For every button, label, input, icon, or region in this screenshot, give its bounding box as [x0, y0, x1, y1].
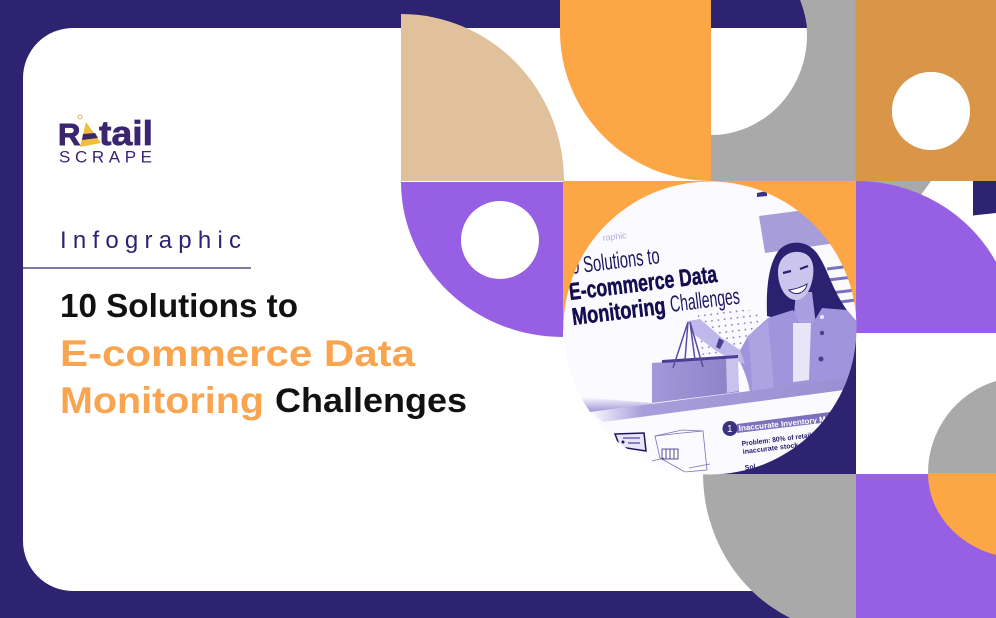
solution line: Sol: [744, 464, 756, 472]
fade under bag: [580, 397, 652, 412]
logo letter R: R: [58, 117, 80, 152]
preview heading small: raphic: [602, 230, 628, 243]
geometric shapes: [401, 0, 996, 618]
shape: white image backing: [563, 330, 713, 474]
hair: [766, 242, 848, 320]
shape: purple quarter with circle: [401, 182, 563, 337]
small navy mark: [757, 191, 767, 197]
dot grid: [698, 310, 758, 356]
jacket buttons: [818, 315, 824, 362]
shape: purple right quarter: [856, 181, 996, 333]
bag body: [652, 357, 739, 403]
eyes and brows: [783, 266, 808, 273]
problem line 2: inaccurate stock: [742, 442, 799, 456]
bag handles: [673, 322, 703, 368]
shape: orange half circle: [928, 473, 996, 555]
title line 3 highlight: Monitoring: [60, 380, 264, 421]
title: [60, 287, 467, 421]
counter band: [590, 378, 852, 422]
logo triangle icon: [78, 115, 101, 147]
bag side: [726, 357, 739, 393]
arm and hand: [688, 319, 745, 364]
title line 2: E-commerce Data: [60, 333, 415, 374]
logo subtitle: SCRAPE: [59, 148, 152, 166]
shape: grey bottom quarter: [703, 474, 856, 618]
shape: grey half circle: [928, 381, 996, 473]
preview contents: [555, 175, 865, 480]
pill text: Inaccurate Inventory Ma: [738, 414, 831, 433]
shape: dark orange square with circle: [856, 0, 996, 181]
shape: navy corner in cut-out: [711, 0, 807, 28]
problem text: [741, 433, 812, 472]
title line 3 end: Challenges: [275, 382, 467, 420]
face: [778, 252, 813, 300]
shape: grey sliver: [856, 181, 931, 195]
smile: [789, 284, 807, 294]
shape: navy corner: [700, 330, 856, 474]
shape: tan quarter circle: [401, 14, 564, 181]
number: 1: [727, 424, 733, 435]
divider line: [23, 267, 251, 269]
shape: orange image backing: [563, 181, 856, 351]
bag top edge: [662, 355, 738, 363]
woman: [688, 243, 858, 393]
logo word end: tail: [99, 115, 153, 153]
stripes: [827, 266, 856, 303]
shape: grey square with cut-out: [711, 0, 856, 181]
shape: white circle in orange square: [892, 72, 970, 150]
shape: purple bottom square: [856, 474, 996, 618]
jacket: [737, 308, 858, 393]
preview heading line 1: 0 Solutions to: [569, 242, 661, 279]
preview heading line 3: Monitoring: [570, 293, 667, 331]
shape: navy block: [973, 181, 996, 216]
step number badge: [722, 412, 833, 436]
shopping bag: [652, 322, 739, 403]
preview background: [555, 175, 865, 480]
jacket sleeve shading: [748, 320, 774, 392]
logo: [58, 115, 153, 166]
title line 1: 10 Solutions to: [60, 287, 298, 324]
preview heading line 3 end: Challenges: [668, 283, 741, 317]
tablet illustration: [615, 433, 646, 451]
neck: [794, 292, 816, 323]
shape: orange quarter circle: [560, 0, 711, 181]
box illustration: [652, 430, 710, 472]
circular infographic preview: [555, 175, 865, 480]
label: Infographic: Infographic: [60, 227, 241, 254]
jacket cuff: [716, 338, 724, 349]
pill: [737, 412, 833, 433]
number circle: [722, 421, 738, 436]
problem line 1: Problem: 80% of retail: [741, 433, 812, 448]
lavender rectangle: [759, 211, 830, 253]
preview heading line 2: E-commerce Data: [567, 261, 719, 306]
shirt: [793, 323, 811, 382]
